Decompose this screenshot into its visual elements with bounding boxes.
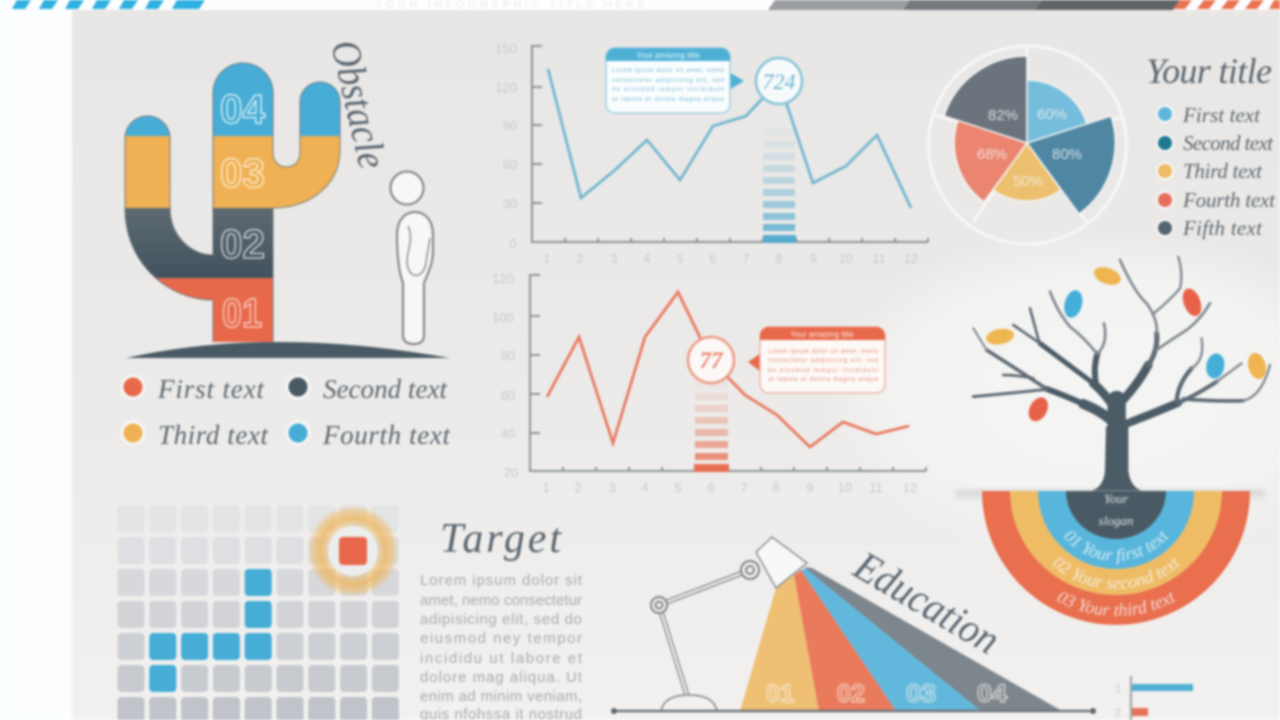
axis labels: 2 <box>576 251 584 266</box>
beam numbers: 03 <box>906 680 936 708</box>
slogan <box>1099 491 1133 528</box>
cactus numbers: 02 <box>220 221 265 267</box>
panel: cactus obstacle <box>120 36 451 450</box>
callout: ut labore et dolore magna aliqua <box>612 97 725 103</box>
beam numbers: 04 <box>977 680 1007 708</box>
beam numbers: 01 <box>766 680 794 708</box>
callout: do eiusmod tempor incididunt <box>612 87 724 93</box>
axis labels: 8 <box>775 251 783 266</box>
cactus numbers: 04 <box>220 86 265 132</box>
stripe bar <box>694 381 729 472</box>
axis labels: 6 <box>707 480 715 495</box>
axis labels: 100 <box>492 310 514 325</box>
target body text: enim ad minim veniam, <box>420 688 582 705</box>
axis labels: 4 <box>643 251 651 266</box>
callout: Lorem ipsum dolor sit amet, nemo <box>612 68 725 74</box>
axis labels: 4 <box>641 480 649 495</box>
slogan: Your <box>1104 491 1129 506</box>
arc labels: 03 Your third text <box>1056 590 1176 618</box>
axis labels: 7 <box>740 480 748 495</box>
pie ring <box>928 46 1126 244</box>
pie legend <box>1157 103 1276 240</box>
red stripes <box>1173 0 1280 9</box>
ground <box>126 342 450 358</box>
cactus numbers: 01 <box>222 290 262 336</box>
axis labels: 11 <box>872 251 886 266</box>
small bar chart <box>1115 676 1193 720</box>
fold shadow <box>955 490 1265 501</box>
grid cells <box>118 505 399 720</box>
value marker: 724 <box>762 69 796 94</box>
pie legend: Fifth text <box>1182 216 1263 240</box>
pie labels: 50% <box>1013 173 1043 190</box>
small bar chart: 1 <box>1115 683 1121 695</box>
lamp <box>651 537 807 711</box>
education title: Education <box>845 543 1007 664</box>
callout: Lorem ipsum dolor sit amet, nemo <box>768 349 879 355</box>
axis labels: 1 <box>542 480 550 495</box>
pie title: Your title <box>1146 51 1272 91</box>
line chart: blue <box>495 41 928 266</box>
cactus numbers: 03 <box>220 150 265 196</box>
value marker <box>756 58 802 104</box>
axis labels: 120 <box>495 80 517 95</box>
pie legend: Second text <box>1183 131 1274 155</box>
stripe bar <box>763 129 796 243</box>
pie legend: Third text <box>1183 159 1263 183</box>
slogan: slogan <box>1099 513 1133 528</box>
panel: pie chart <box>928 46 1276 244</box>
blue stripes <box>12 0 205 9</box>
axis labels: 150 <box>495 41 517 56</box>
arc labels <box>1052 530 1180 618</box>
axis labels: 8 <box>772 480 780 495</box>
value marker <box>688 337 734 383</box>
axis labels: 60 <box>501 388 515 403</box>
panel: target grid <box>118 505 583 720</box>
axis labels: 11 <box>869 480 883 495</box>
cactus legend: Third text <box>158 420 269 450</box>
axis labels: 60 <box>503 157 517 172</box>
target marker <box>319 517 387 585</box>
top banner <box>12 0 1280 11</box>
target body text <box>420 572 583 720</box>
axis labels <box>495 41 918 266</box>
pie labels: 68% <box>977 146 1007 163</box>
beam numbers: 02 <box>837 680 865 708</box>
grey segments <box>768 0 1180 10</box>
callout: consectetur adipisicing elit, sed <box>612 78 724 84</box>
axis labels: 12 <box>904 251 918 266</box>
target body text: incididu ut labore et <box>420 650 583 667</box>
axes <box>532 46 928 242</box>
callout: Your amazing title <box>636 51 700 60</box>
cactus bands <box>120 60 345 344</box>
pie slices <box>944 56 1115 214</box>
axes <box>530 275 926 471</box>
target body text: dolore mag aliqua. Ut <box>420 669 583 686</box>
axis labels: 5 <box>676 251 684 266</box>
pie labels: 80% <box>1052 146 1082 163</box>
axis labels: 3 <box>608 480 616 495</box>
axis labels <box>492 271 917 495</box>
callout: do eiusmod tempor incididunt <box>768 368 878 374</box>
axis labels: 9 <box>809 251 817 266</box>
target title: Target <box>440 516 562 562</box>
callout: consectetur adipisicing elit, sed <box>768 358 878 364</box>
cactus legend: Fourth text <box>322 420 451 450</box>
arc labels: 01 Your first text <box>1063 530 1170 566</box>
axis labels: 1 <box>543 251 551 266</box>
axis labels: 0 <box>509 236 517 251</box>
axis labels: 80 <box>501 348 515 363</box>
line <box>547 292 909 447</box>
axis labels: 10 <box>838 480 852 495</box>
callout <box>606 48 744 113</box>
axis labels: 10 <box>839 251 853 266</box>
target body text: Lorem ipsum dolor sit <box>420 572 583 589</box>
arc labels: 02 Your second text <box>1052 556 1180 590</box>
panel: tree and rainbow <box>954 254 1272 626</box>
line chart: red <box>492 271 926 495</box>
axis labels: 5 <box>674 480 682 495</box>
cactus legend <box>122 374 451 450</box>
cactus legend: Second text <box>323 374 448 404</box>
axis labels: 2 <box>574 480 582 495</box>
target body text: amet, nemo consectetur <box>420 592 582 609</box>
pie legend: First text <box>1182 103 1261 127</box>
cactus legend: First text <box>157 374 265 404</box>
axis labels: 3 <box>610 251 618 266</box>
target body text: eiusmod ney tempor <box>420 630 582 647</box>
ground line <box>611 708 1096 714</box>
leaves <box>985 264 1269 425</box>
blue path cells <box>149 569 272 692</box>
callout: ut labore et dolore magna aliqua <box>768 377 879 383</box>
axis labels: 90 <box>503 118 517 133</box>
axis labels: 40 <box>501 426 515 441</box>
panel: education lamp <box>611 537 1096 714</box>
axis labels: 9 <box>806 480 814 495</box>
pie labels <box>977 106 1082 190</box>
small bar chart: 2 <box>1115 707 1121 719</box>
pie legend: Fourth text <box>1182 188 1276 212</box>
line <box>548 69 911 208</box>
callout: Your amazing title <box>790 330 854 339</box>
tree <box>973 257 1270 491</box>
axis labels: 12 <box>903 480 917 495</box>
pie labels: 60% <box>1037 106 1067 123</box>
cactus numbers <box>220 86 265 336</box>
icon: person <box>390 172 433 344</box>
beam numbers <box>766 680 1007 708</box>
light beams <box>740 567 1062 711</box>
axis labels: 7 <box>742 251 750 266</box>
target body text: adipisicing elit, sed do <box>420 611 582 628</box>
value marker: 77 <box>700 348 724 373</box>
axis labels: 20 <box>504 465 518 480</box>
callout <box>748 327 885 393</box>
obstacle title: Obstacle <box>322 36 396 173</box>
axis labels: 30 <box>503 196 517 211</box>
pie labels: 82% <box>988 107 1018 124</box>
rainbow arcs <box>982 491 1250 625</box>
axis labels: 6 <box>709 251 717 266</box>
axis labels: 120 <box>492 271 514 286</box>
